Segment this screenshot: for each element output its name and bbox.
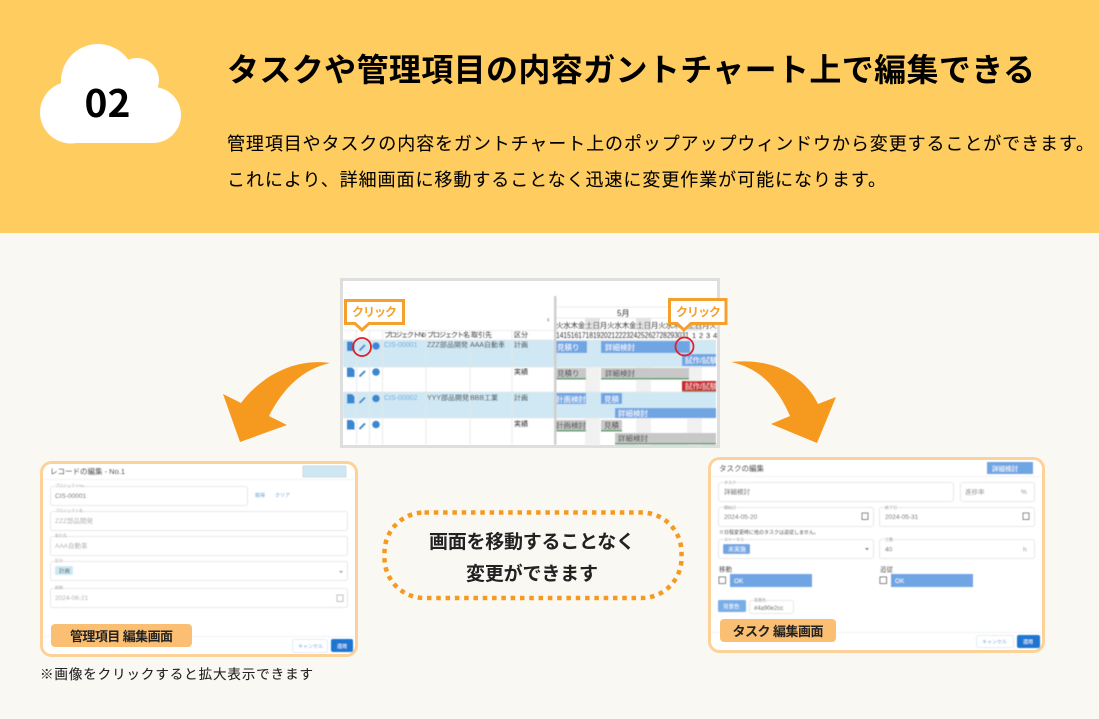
gantt table text: 区分 [514,330,528,339]
gantt table text: YYY部品開発 [427,393,469,402]
task form text: 詳細検討 [724,487,750,496]
record form text: クリア [275,493,290,499]
background color control [718,596,783,612]
gantt timeline header: 2 [699,331,703,340]
label: record edit screen: 管理項目 編集画面 [70,629,173,644]
gantt timeline header: 4 [713,331,717,340]
callout: no screen change: 画面を移動することなく [429,531,635,553]
red circle: edit icon [353,338,371,356]
gantt bars: 見積り [557,342,580,352]
header band [0,0,1099,233]
panel: task edit screen [710,458,1044,652]
task form text: 2024-05-31 [885,514,919,521]
gantt table text: AAA自動車 [470,340,505,349]
gantt bars: 詳細検討 [605,342,635,352]
note text: ※画像をクリックすると拡大表示できます [40,667,313,682]
task buttons: 適用 [1023,638,1033,646]
task form text: % [1021,489,1027,496]
record form text: CIS-00001 [55,493,86,500]
record form text: 取引先 [55,532,67,538]
task form text: 2024-05-20 [724,514,758,521]
record form fields [50,486,348,608]
record buttons: 適用 [337,643,347,650]
record form text: 取得 [255,492,265,499]
task form text: 未実施 [728,546,746,554]
record buttons [292,639,353,652]
task form text: 追従 [880,564,894,574]
task form fields [718,482,1034,614]
gantt bars: 見積り [557,368,580,378]
gantt table rows [343,307,716,445]
gantt table text: 取引先 [471,330,492,339]
gantt bars [556,341,718,444]
gantt table text: 実績 [514,367,528,376]
task form text: ※日程変更時に他のタスクは追従しません。 [719,529,819,536]
record form text [55,482,343,602]
record buttons: キャンセル [298,644,323,650]
gantt bars: 見積 [604,420,619,430]
task form text: 40 [885,546,893,554]
record form text: 2024-06-21 [55,595,89,602]
red circle: task bar handle [676,338,694,356]
record form text: 納期 [55,584,63,590]
callout: click left [346,300,404,330]
gantt table text: プロジェクト名 [427,330,470,339]
description text: これにより、詳細画面に移動することなく迅速に変更作業が可能になります。 [227,170,886,190]
label: record edit screen [51,624,192,647]
gantt chart screenshot [342,280,726,446]
gantt table text: 計画 [514,340,528,349]
task checkboxes [719,574,973,587]
callout: click right [670,300,726,330]
gantt table text: BBB工業 [470,393,498,402]
task checkboxes: OK [734,578,744,585]
record form text: プロジェクト名 [55,507,83,513]
gantt table text: プロジェクトNo [384,331,426,339]
task form text: 開始日 [724,504,736,510]
task edit heading: タスクの編集 [719,463,764,473]
record edit heading: レコードの編集 - No.1 [50,466,125,476]
task form text: h [1023,546,1027,554]
callout: click left: クリック [352,305,397,319]
task checkboxes: OK [895,578,905,585]
description text: 管理項目やタスクの内容をガントチャート上のポップアップウィンドウから変更することができます。 [227,134,1094,154]
task color swatch [987,462,1033,474]
gantt table text [384,330,528,428]
arrow: left [223,362,330,442]
task form text: タスク [724,479,736,485]
gantt timeline header: 1 [692,331,696,340]
title: タスクや管理項目の内容ガントチャート上で編集できる [227,52,1035,88]
gantt timeline header: 3 [706,331,710,340]
gantt timeline header: 5月 [617,309,629,318]
gantt timeline header [547,309,717,340]
background color control: #4a90e2cc [754,606,783,612]
record form text: ZZZ部品開発 [55,516,93,525]
callout: no screen change: 変更ができます [466,562,598,585]
gantt bars: 計画検討 [556,394,586,404]
gantt bars: 見積 [604,394,619,404]
gantt table text: 実績 [514,419,528,428]
gantt bars: 計画検討 [556,420,586,430]
panel: record edit screen [42,462,356,656]
gantt timeline header: ‹ [547,315,550,324]
label: task edit screen: タスク 編集画面 [732,624,824,639]
record color swatch [303,466,346,477]
gantt table text: ZZZ部品開発 [427,340,468,349]
gantt table text: CIS-00001 [384,342,418,349]
task color swatch: 詳細検討 [992,464,1018,473]
gantt table text: 計画 [514,393,528,402]
icons: row actions [347,342,380,430]
task form text: ステータス [724,536,744,542]
task buttons: キャンセル [982,640,1007,646]
record form text: プロジェクトNo. [55,482,85,488]
description text [227,134,1094,190]
background color control: 背景色 [723,602,740,610]
task form text: 終了日 [885,504,897,510]
task buttons [976,635,1040,648]
task form text [719,479,1029,574]
record form text: AAA自動車 [55,541,88,550]
gantt timeline header: 141516171819202122232425262728293031 [556,331,689,340]
callout: no screen change [384,512,682,598]
task form text: 進捗率 [965,487,985,496]
gantt bars: 詳細検討 [618,433,648,443]
gantt bars: 試作/試験 [685,355,718,365]
icon: cloud with number 02: 02 [84,73,130,128]
gantt bars: 試作/試験 [685,381,718,391]
task form text: 工数 [885,536,893,542]
task form text: 移動 [719,564,732,574]
icon: cloud with number 02 [40,44,181,144]
gantt table text: CIS-00002 [384,395,418,402]
record form text: 区分 [55,557,63,563]
background color control: 背景色 [754,596,766,602]
callout: click right: クリック [676,305,721,319]
label: task edit screen [720,619,836,642]
gantt bars: 詳細検討 [605,368,635,378]
arrow: right [731,361,836,443]
gantt bars: 詳細検討 [618,408,648,418]
gantt timeline header: 火水木金土日月火水木金土日月火水木金土日月火 [556,320,717,330]
record form text: 計画 [59,567,71,575]
